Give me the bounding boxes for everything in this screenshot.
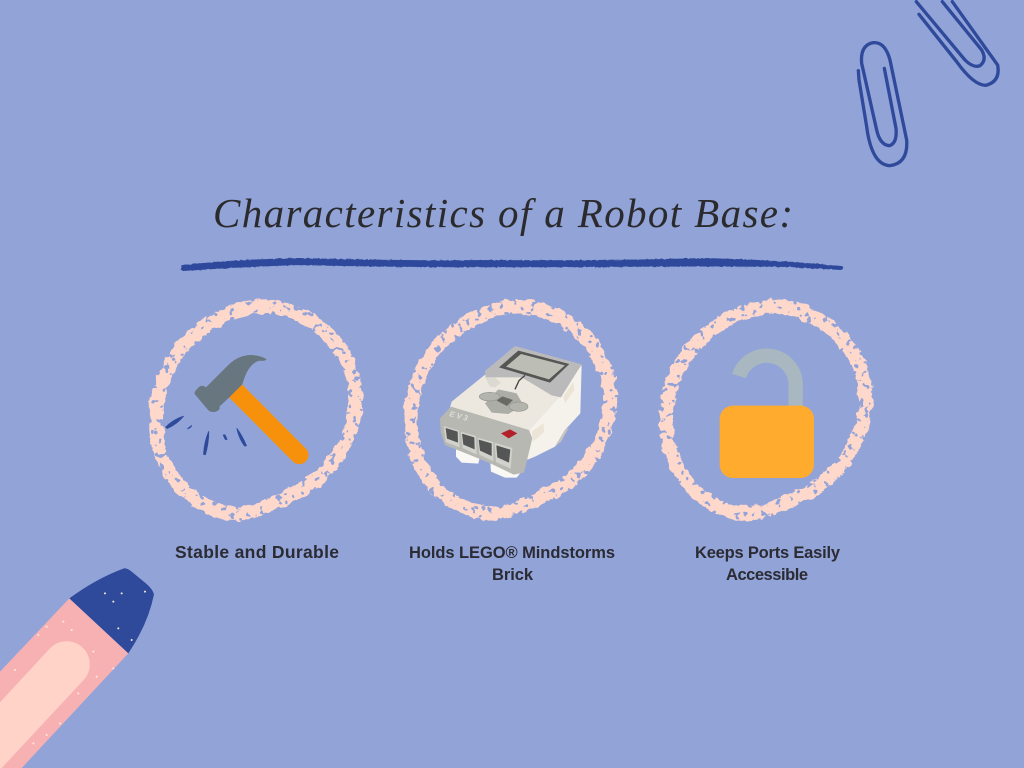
- EV3 label: EV3: [448, 409, 470, 423]
- ring: keeps ports accessible: [666, 306, 866, 514]
- padlock body: [720, 406, 814, 478]
- side details: [532, 382, 574, 442]
- icon: paperclip right: [916, 2, 998, 85]
- brick side: [523, 365, 582, 472]
- crayon body: [0, 598, 128, 768]
- ports: [444, 426, 512, 469]
- title underline: [183, 260, 841, 269]
- label: holds LEGO brick: Brick: [492, 566, 534, 584]
- LEGO badge: [501, 429, 517, 438]
- label: holds LEGO brick: Holds LEGO® Mindstorms: [409, 544, 615, 562]
- label: keeps ports accessible: Accessible: [726, 566, 808, 584]
- label: keeps ports accessible: Keeps Ports Easily: [695, 544, 841, 562]
- control buttons: [485, 389, 523, 414]
- icon: paperclip left: [858, 43, 907, 166]
- padlock shackle: [739, 356, 796, 407]
- screen frame: [499, 351, 569, 383]
- label: stable and durable: Stable and Durable: [175, 542, 339, 562]
- crayon tip: [69, 568, 154, 653]
- icon: crayon: [0, 568, 154, 768]
- label: keeps ports accessible: [695, 544, 841, 584]
- crayon highlight: [0, 641, 90, 768]
- label: holds LEGO brick: [409, 544, 615, 584]
- brick top face: [450, 373, 560, 432]
- hammer handle: [236, 391, 299, 455]
- impact sparks: [166, 416, 246, 455]
- crayon speckles: [14, 591, 146, 744]
- ring: stable and durable: [156, 306, 356, 514]
- icon: hammer: [166, 355, 299, 455]
- ring: holds brick: [410, 306, 610, 514]
- hammer head: [195, 355, 267, 412]
- screen bezel: [485, 346, 582, 397]
- icon: open padlock: [720, 356, 814, 478]
- title: Characteristics of a Robot Base:: [213, 190, 793, 236]
- brick feet: [456, 448, 526, 478]
- brick front panel: [440, 407, 532, 475]
- icon: EV3 brick: [440, 346, 582, 478]
- screen: [506, 354, 565, 379]
